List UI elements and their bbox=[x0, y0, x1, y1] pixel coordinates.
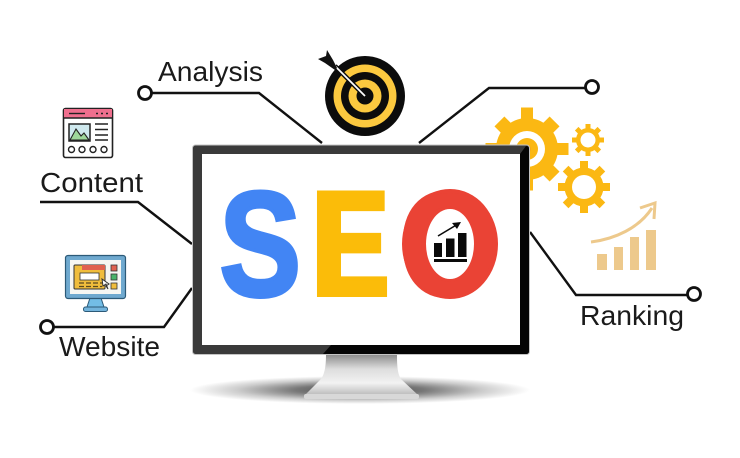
letter O: O bbox=[399, 160, 500, 327]
icon: medium gear bbox=[558, 161, 610, 213]
icon: content window bbox=[64, 108, 112, 158]
icon: large gear bbox=[486, 108, 568, 190]
connector: Content bbox=[40, 202, 192, 244]
monitor stand bbox=[304, 355, 419, 399]
label: Website: Website bbox=[59, 331, 160, 362]
label: Ranking: Ranking bbox=[580, 300, 684, 331]
icon: growth chart bbox=[591, 203, 656, 270]
monitor bbox=[192, 145, 530, 354]
screen bbox=[202, 154, 520, 345]
icon: mini bar chart bbox=[434, 222, 467, 262]
icon: target with arrow bbox=[318, 50, 405, 136]
icon: small gear bbox=[572, 124, 604, 156]
monitor shadow bbox=[190, 376, 530, 404]
connector: Ranking bbox=[530, 232, 700, 300]
connector: Website bbox=[40, 288, 192, 334]
O hole bbox=[426, 209, 474, 279]
connector: Analysis bbox=[138, 86, 322, 143]
letter E: E bbox=[311, 160, 390, 327]
connector: top right bbox=[419, 80, 598, 143]
label: Content: Content bbox=[40, 167, 143, 198]
label: Analysis: Analysis bbox=[158, 56, 263, 87]
icon: website monitor bbox=[66, 256, 126, 312]
letter S: S bbox=[220, 161, 301, 327]
